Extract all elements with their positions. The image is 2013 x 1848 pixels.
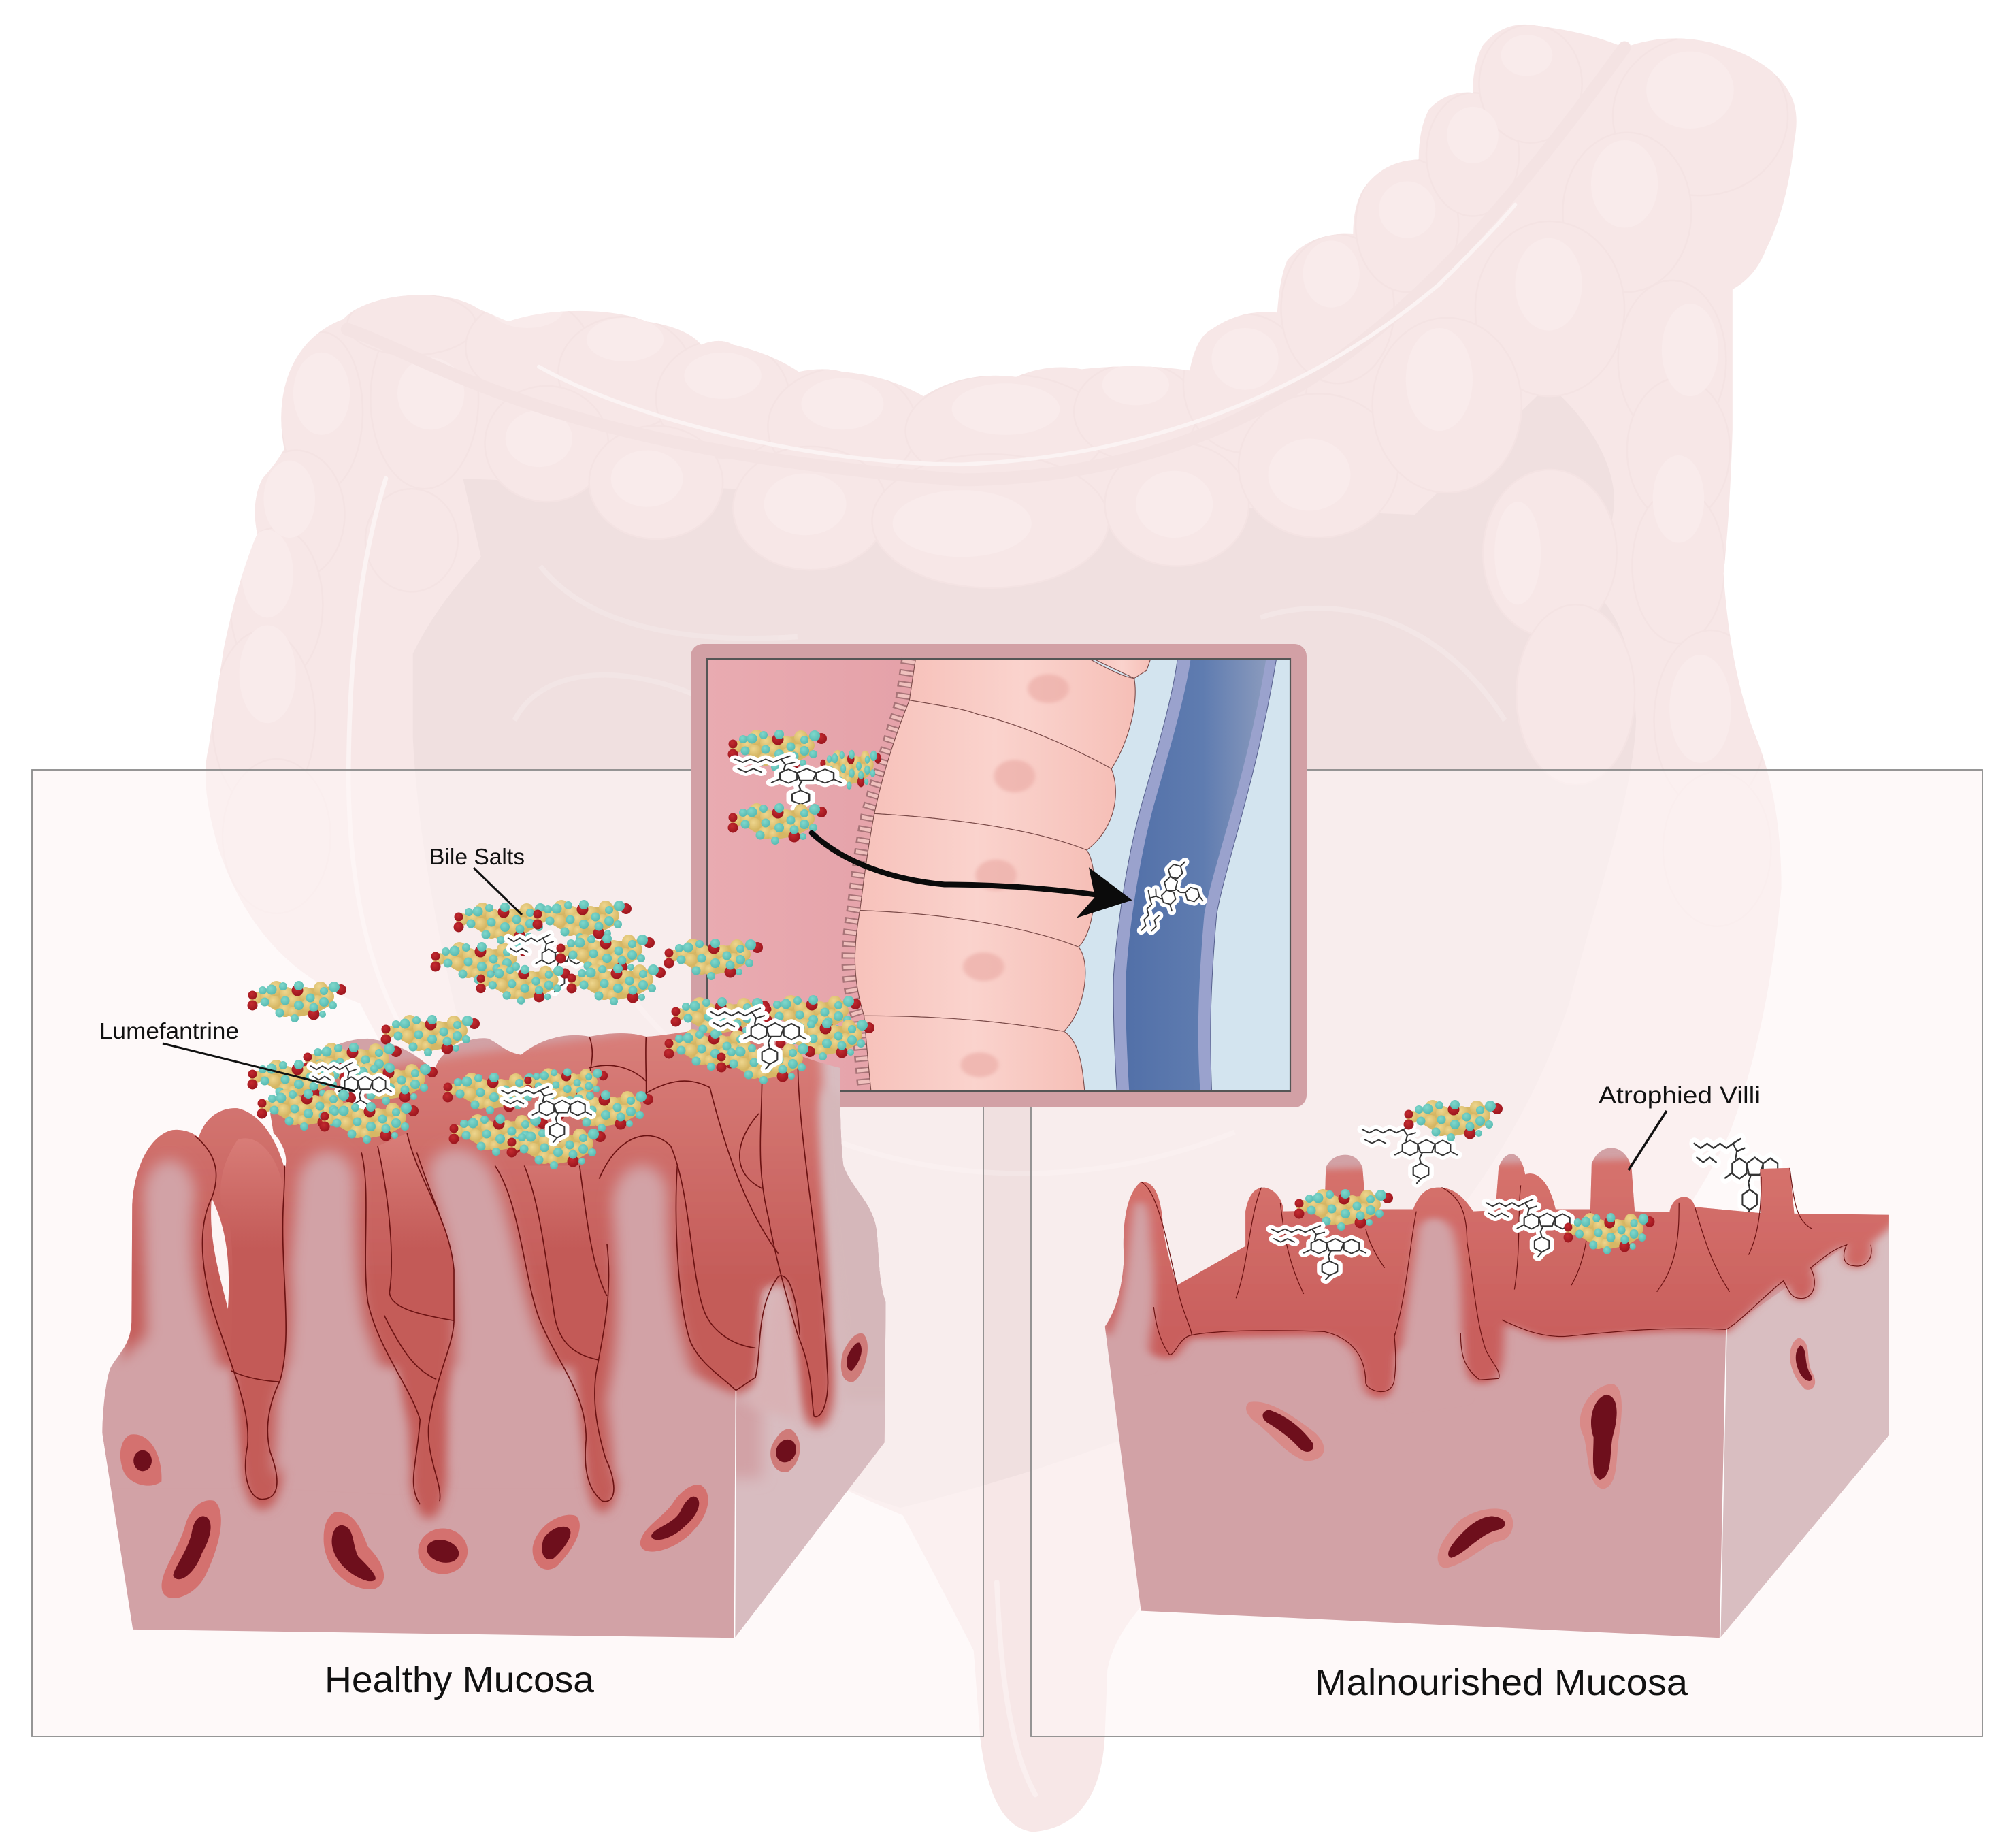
- tissue body with atrophied villi: [1105, 1148, 1889, 1638]
- blood vessels in healthy mucosa: [120, 1333, 868, 1598]
- haustra lobes: [212, 25, 1776, 756]
- bile salt micelle: left villus cluster: [248, 1043, 438, 1144]
- label: Lumefantrine: [99, 1018, 355, 1091]
- villi contour lines: [195, 1037, 828, 1504]
- atrophied villi contour lines: [1141, 1168, 1871, 1392]
- inset lumen background: [707, 659, 1006, 1091]
- inset epithelial cells: [855, 659, 1151, 1091]
- label: Atrophied Villi: [1599, 1082, 1761, 1170]
- label: Bile Salts: Bile Salts: [429, 844, 525, 869]
- malnourished mucosa tissue block: [1084, 1139, 1907, 1663]
- inner frame border: [707, 659, 1290, 1091]
- malnourished: drug and bile salts upper left: [1362, 1100, 1503, 1183]
- inset frame: [691, 644, 1307, 1107]
- panel: enterocyte absorption inset: [691, 644, 1307, 1107]
- lobe highlights: [240, 35, 1734, 763]
- label: Lumefantrine: Lumefantrine: [99, 1018, 239, 1043]
- front and side edge highlight: [1720, 1329, 1726, 1638]
- bile salt micelle: centre villus cluster: [442, 1068, 653, 1169]
- interstitial fluid: [1007, 659, 1290, 1091]
- malnourished: drug and bile salts centre: [1486, 1199, 1654, 1257]
- bile salt: molecule above villi: [381, 1015, 480, 1056]
- malnourished: drug and bile salts left: [1271, 1189, 1393, 1280]
- gap between villi: [211, 1198, 229, 1309]
- label: Atrophied Villi: Atrophied Villi: [1599, 1082, 1761, 1109]
- lumefantrine behind villus: [1695, 1139, 1784, 1216]
- panel: healthy mucosa frame: [32, 770, 983, 1736]
- front and side edge highlight: [734, 1391, 736, 1638]
- tissue body with villi colouring: [102, 1031, 886, 1638]
- bile salt: single molecule left: [248, 981, 346, 1022]
- heading: Healthy Mucosa: Healthy Mucosa: [325, 1659, 595, 1700]
- lumefantrine in blood vessel: [1138, 855, 1211, 944]
- taenia streaks: [348, 205, 1515, 1795]
- background: pale large intestine: [206, 25, 1797, 1832]
- arrow: absorption into blood: [812, 833, 1132, 918]
- deep crypt shading: [220, 1133, 607, 1382]
- healthy mucosa tissue block: [102, 1031, 886, 1638]
- cell nuclei: [960, 675, 1069, 1077]
- mesentery band: [347, 48, 1624, 480]
- heading: Malnourished Mucosa: Malnourished Mucosa: [1315, 1662, 1688, 1703]
- colon silhouette: [206, 25, 1797, 1832]
- microvilli brush border: [850, 659, 909, 1091]
- blood vessel: [1113, 659, 1277, 1091]
- bile salt: single molecule upper right: [664, 939, 763, 980]
- bile salt micelle carrying drug in lumen: [728, 730, 881, 845]
- panel: malnourished mucosa frame: [1031, 770, 1982, 1736]
- label: Bile Salts: [429, 844, 525, 915]
- bile salt micelle: right villus cluster: [664, 995, 874, 1084]
- bile salt micelle: top cluster with lumefantrine: [430, 900, 666, 1005]
- small intestine loops: [514, 483, 1524, 1173]
- small intestine central mass: [413, 385, 1636, 1508]
- blood vessels in malnourished mucosa: [1246, 1338, 1815, 1568]
